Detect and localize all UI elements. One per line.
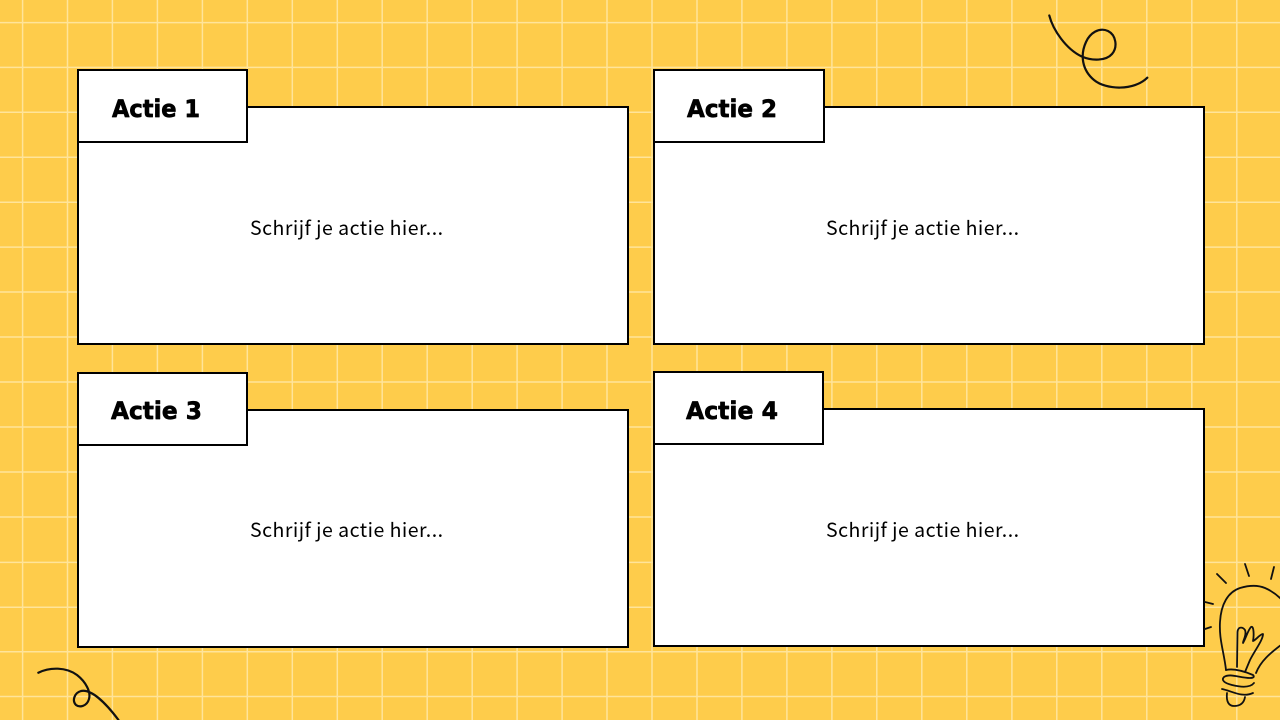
panel: Actie 2 xyxy=(654,70,1204,344)
icon: bottom left curl xyxy=(38,669,118,720)
tab: Actie 3 xyxy=(78,373,247,445)
text: Actie 4 body: Schrijf je actie hier... xyxy=(826,514,1019,543)
text: Actie 1 body: Schrijf je actie hier... xyxy=(250,212,443,241)
tab: Actie 4 xyxy=(654,372,823,444)
tab: Actie 1: Actie 1 xyxy=(112,95,200,123)
panel: Actie 3 xyxy=(78,373,628,647)
panel: Actie 4 xyxy=(654,372,1204,646)
panel: Actie 1 xyxy=(78,70,628,344)
icon: light bulb xyxy=(1205,564,1280,706)
tab: Actie 1 xyxy=(78,70,247,142)
text: Actie 2 body: Schrijf je actie hier... xyxy=(826,212,1019,241)
tab: Actie 2: Actie 2 xyxy=(687,95,777,123)
tab: Actie 4: Actie 4 xyxy=(686,397,778,425)
icon: top right curl xyxy=(1049,16,1147,88)
tab: Actie 2 xyxy=(654,70,824,142)
tab: Actie 3: Actie 3 xyxy=(111,397,202,425)
text: Actie 3 body: Schrijf je actie hier... xyxy=(250,514,443,543)
